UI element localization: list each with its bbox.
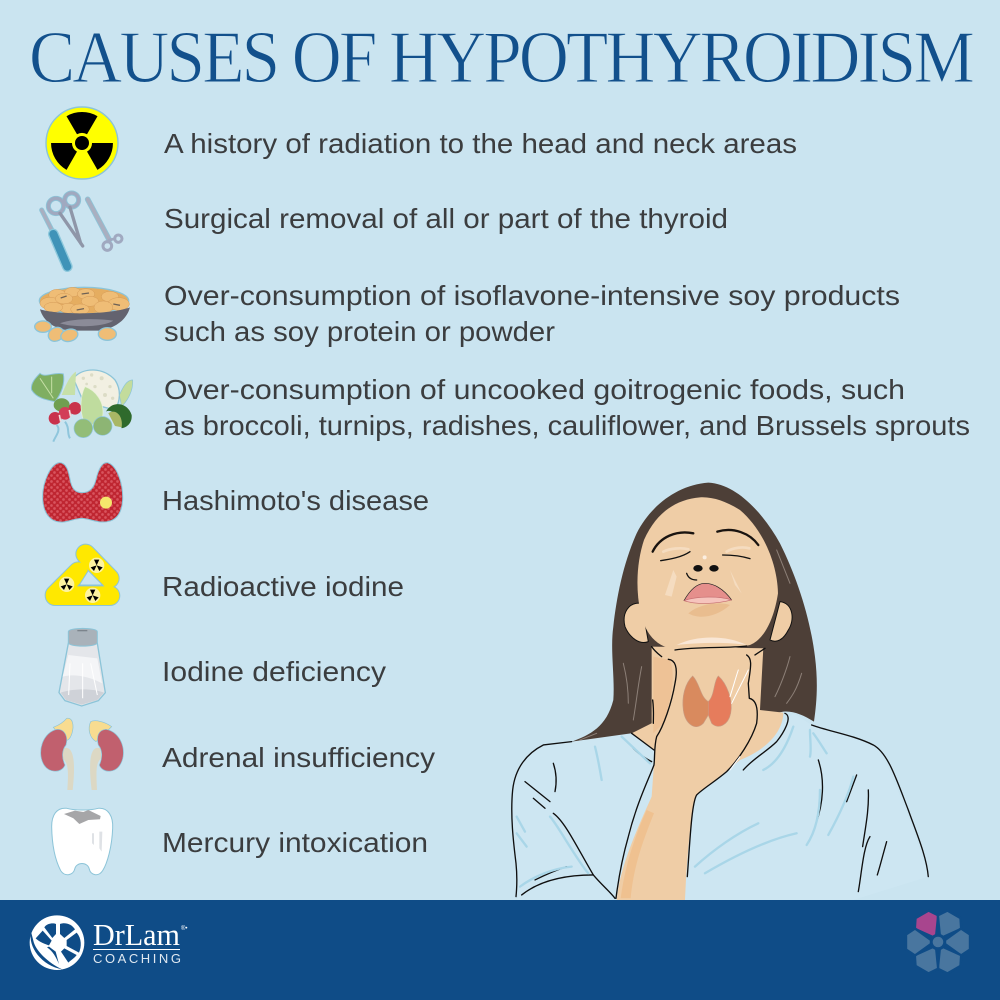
text: goitrogenic foods: Over-consumption of uncooked goitrogenic foods, such — [164, 374, 905, 405]
icon: thyroid — [43, 463, 123, 522]
text: soy products: such as soy protein or powder — [164, 316, 555, 347]
text: radiation: A history of radiation to the head and neck areas — [164, 128, 797, 159]
text: goitrogenic foods: as broccoli, turnips, radishes, cauliflower, and Brussels sprouts — [164, 410, 970, 441]
wordmark: DrLam — [93, 917, 180, 952]
line work — [512, 646, 928, 898]
nose — [687, 573, 697, 580]
ears — [624, 603, 648, 643]
text: radioactive iodine: Radioactive iodine — [162, 571, 404, 602]
illustration: woman holding her neck — [512, 483, 928, 900]
icon: salt shaker — [59, 628, 105, 706]
text: soy products — [164, 280, 900, 347]
skin: neck, arm and hand — [617, 647, 783, 900]
icon: radiation symbol — [46, 107, 118, 179]
lips — [684, 583, 732, 601]
text: iodine deficiency: Iodine deficiency — [162, 656, 386, 687]
closed eyes — [661, 552, 750, 561]
registered mark: ®• — [181, 925, 188, 932]
face — [637, 497, 778, 651]
icon: tooth with filling — [52, 808, 113, 875]
hair — [572, 483, 817, 745]
icon: surgical tools — [42, 193, 122, 267]
footer band — [0, 900, 1000, 1000]
text: Hashimoto's: Hashimoto's disease — [162, 485, 429, 516]
shirt shading — [517, 727, 853, 887]
hair highlights — [580, 550, 802, 740]
icon: flower — [906, 908, 970, 976]
icon: goitrogenic vegetables — [31, 370, 133, 442]
thyroid — [683, 676, 731, 727]
text: mercury intoxication: Mercury intoxication — [162, 827, 428, 858]
text: surgical removal: Surgical removal of all or part of the thyroid — [164, 203, 728, 234]
logo: DrLam Coaching — [30, 915, 188, 970]
icon: bowl of soybeans — [35, 287, 130, 344]
text: soy products: Over-consumption of isoflavone-intensive soy products — [164, 280, 900, 311]
icon: radioactive iodine — [55, 554, 110, 603]
logo mark — [30, 915, 84, 970]
shirt — [512, 713, 928, 900]
icon: kidneys — [41, 718, 123, 790]
text: goitrogenic foods — [164, 374, 970, 441]
eyebrows — [653, 530, 758, 552]
tagline: COACHING — [93, 951, 181, 966]
text: adrenal insufficiency: Adrenal insufficiency — [162, 742, 435, 773]
